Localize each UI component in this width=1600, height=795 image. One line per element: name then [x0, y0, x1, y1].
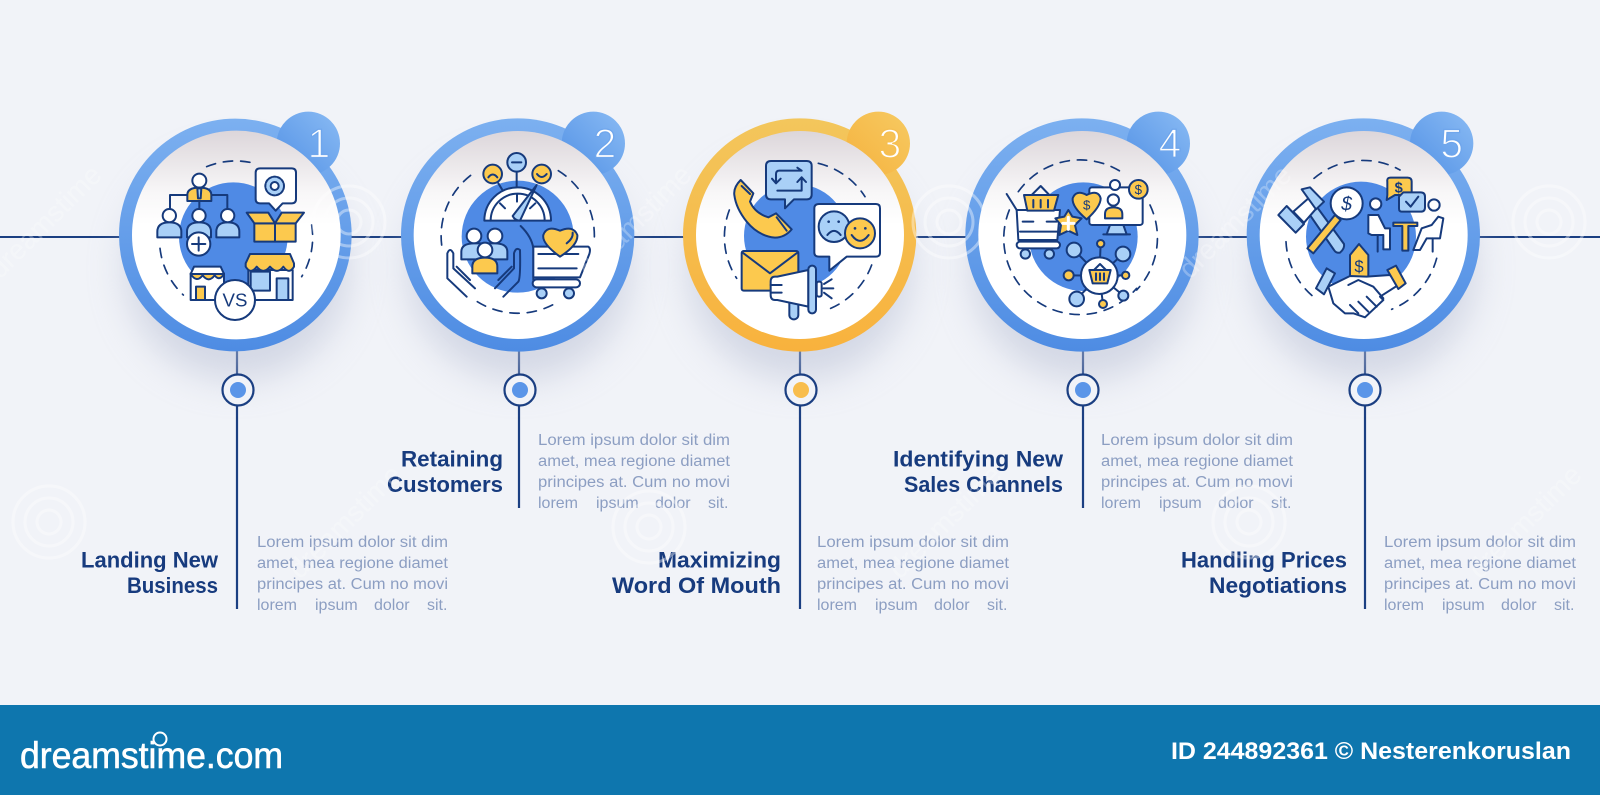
step 4 title	[893, 446, 1064, 497]
horizontal timeline	[0, 236, 1600, 238]
footer credit: ID 244892361 © Nesterenkoruslan	[1171, 738, 1571, 765]
step 2 medallion: 2	[594, 120, 616, 166]
step 5 body: Lorem ipsum dolor sit dim	[1384, 534, 1576, 551]
step 3 medallion	[683, 112, 916, 352]
step 2 body	[538, 432, 731, 512]
step 4 title: Identifying New	[893, 446, 1064, 472]
step 3 body: Lorem ipsum dolor sit dim	[817, 534, 1009, 551]
step 2 medallion	[401, 112, 634, 352]
step 3 title: Maximizing	[658, 548, 781, 572]
step 5 marker	[1350, 374, 1380, 406]
icon: sales channels	[1007, 180, 1148, 308]
step 3 body: dolor	[934, 597, 970, 614]
step 1 body: amet, mea regione diamet	[257, 555, 449, 572]
step 4 medallion	[965, 112, 1199, 352]
step 5 body: ipsum	[1442, 597, 1485, 614]
step 2 title	[387, 446, 503, 497]
step 4 body: ipsum	[1159, 495, 1202, 512]
step 4 body: sit.	[1271, 495, 1291, 512]
step 5 body: principes at. Cum no movi	[1384, 576, 1576, 593]
watermark overlay: dreamstime	[1462, 459, 1588, 584]
step 4 title: Sales Channels	[904, 472, 1063, 497]
icon: team and new business: VS	[223, 290, 247, 311]
step 2 body: ipsum	[596, 495, 639, 512]
panel: step 5	[1181, 112, 1577, 614]
step 3 marker	[786, 374, 816, 406]
watermark overlay: dreamstime	[882, 459, 1008, 584]
step 2 title: Customers	[387, 472, 503, 497]
panel: step 2	[387, 112, 731, 512]
step 3 body: amet, mea regione diamet	[817, 555, 1010, 572]
step 4 medallion: 4	[1159, 120, 1181, 166]
icon: sales channels: $	[1083, 197, 1091, 212]
step 1 title: Business	[127, 573, 218, 598]
step 1 body: lorem	[257, 597, 297, 614]
step 5 body: amet, mea regione diamet	[1384, 555, 1577, 572]
panel: step 4	[893, 112, 1294, 512]
step 3 body: lorem	[817, 597, 857, 614]
step 3 title	[612, 548, 781, 598]
step 5 medallion	[1247, 112, 1480, 352]
step 1 marker	[222, 374, 254, 406]
step 2 body: dolor	[655, 495, 691, 512]
step 1 body: sit.	[427, 597, 447, 614]
step 4 body	[1101, 432, 1294, 512]
step 4 body: principes at. Cum no movi	[1101, 474, 1293, 491]
step 3 medallion: 3	[879, 120, 901, 166]
step 1 body: principes at. Cum no movi	[257, 576, 448, 593]
step 5 title: Handling Prices	[1181, 548, 1347, 572]
step 1 body: dolor	[374, 597, 410, 614]
step 2 body: lorem	[538, 495, 578, 512]
step 3 body: ipsum	[875, 597, 918, 614]
step 2 marker	[504, 374, 536, 406]
icon: price negotiation: $	[1340, 194, 1353, 215]
watermark overlay	[0, 159, 1588, 584]
icon: price negotiation	[1278, 178, 1443, 317]
step 2 body: principes at. Cum no movi	[538, 474, 730, 491]
step 5 medallion: 5	[1440, 120, 1463, 166]
watermark overlay: dreamstime	[282, 459, 408, 584]
step 4 body: dolor	[1218, 495, 1254, 512]
footer logo: dreamstime.com	[20, 735, 283, 776]
step 4 marker	[1068, 374, 1098, 406]
step 4 body: Lorem ipsum dolor sit dim	[1101, 432, 1293, 449]
step 3 body	[817, 534, 1010, 614]
panel: step 1	[81, 112, 449, 614]
watermark overlay: dreamstime	[572, 159, 698, 284]
icon: team and new business	[157, 168, 304, 320]
step 4 body: lorem	[1101, 495, 1141, 512]
step 1 body: Lorem ipsum dolor sit dim	[257, 534, 448, 551]
icon: word of mouth	[734, 161, 880, 319]
step 1 title	[81, 548, 219, 598]
icon: price negotiation: $	[1395, 181, 1403, 197]
step 3 body: sit.	[987, 597, 1007, 614]
step 3 title: Word Of Mouth	[612, 573, 781, 598]
footer bar	[0, 705, 1600, 795]
icon: customer satisfaction	[447, 153, 590, 298]
icon: price negotiation: $	[1354, 257, 1364, 276]
step 5 body: lorem	[1384, 597, 1424, 614]
step 1 body: ipsum	[315, 597, 358, 614]
step 3 body: principes at. Cum no movi	[817, 576, 1009, 593]
step 5 body: sit.	[1554, 597, 1574, 614]
step 2 body: sit.	[708, 495, 728, 512]
watermark overlay: dreamstime	[1172, 159, 1298, 284]
step 2 body: amet, mea regione diamet	[538, 453, 731, 470]
step 5 body	[1384, 534, 1577, 614]
step 1 medallion: 1	[308, 120, 330, 166]
icon: sales channels: $	[1135, 182, 1143, 197]
step 5 title	[1181, 548, 1347, 598]
panel: step 3	[612, 112, 1010, 614]
step 2 title: Retaining	[401, 446, 503, 472]
step 4 body: amet, mea regione diamet	[1101, 453, 1294, 470]
step 1 body	[257, 534, 449, 614]
step 1 medallion	[119, 112, 352, 351]
step 5 title: Negotiations	[1209, 573, 1347, 598]
step 5 body: dolor	[1501, 597, 1537, 614]
step 2 body: Lorem ipsum dolor sit dim	[538, 432, 730, 449]
step 1 title: Landing New	[81, 548, 219, 572]
